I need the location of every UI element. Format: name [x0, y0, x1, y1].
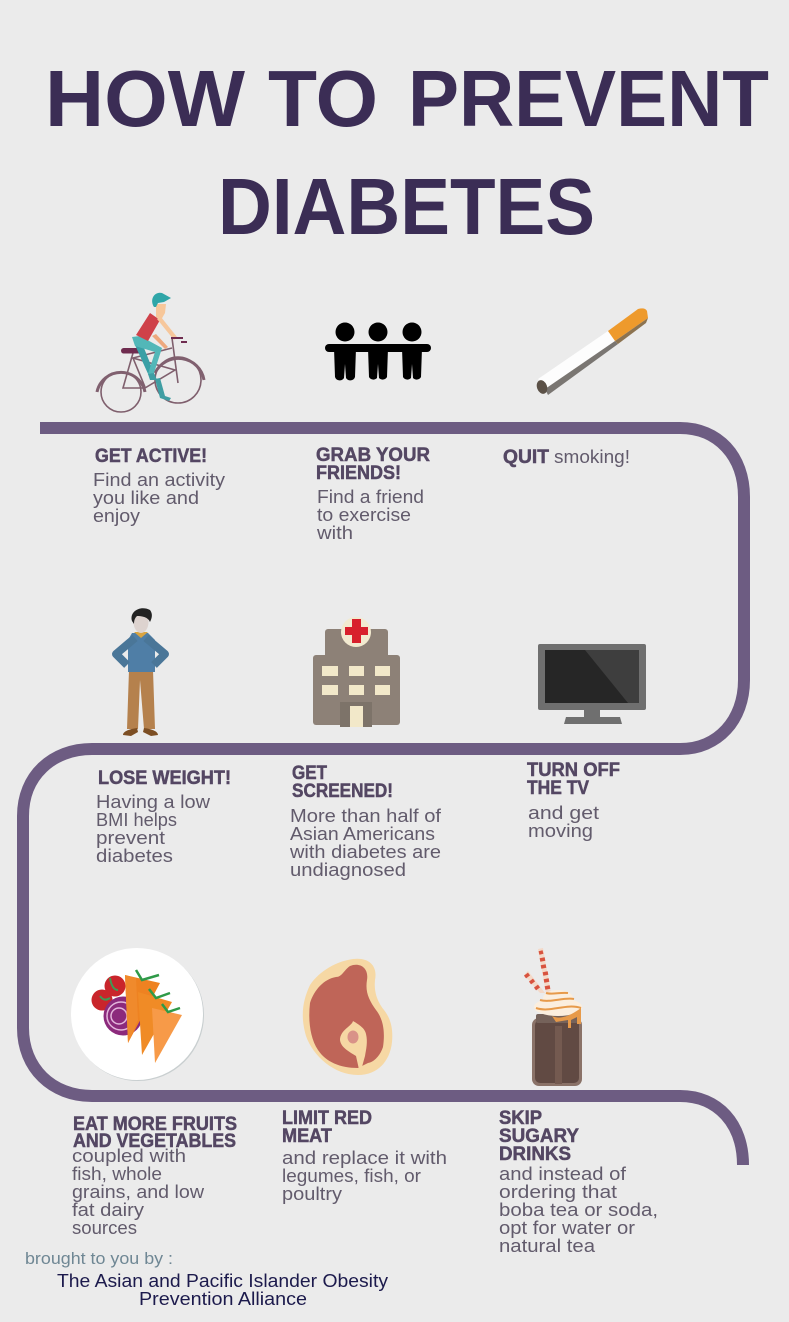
step: eat more fruits and vegetables: AND VEGETABLES: [73, 1131, 236, 1152]
step: lose weight: diabetes: [96, 845, 173, 866]
step: limit red meat: LIMIT RED: [282, 1108, 372, 1129]
step: get screened: with diabetes are: [289, 841, 441, 862]
step: get screened: More than half of: [290, 805, 442, 826]
step: eat more fruits and vegetables: grains, and low: [72, 1181, 205, 1202]
step: eat more fruits and vegetables: EAT MORE FRUITS: [73, 1114, 237, 1135]
step: grab your friends: [316, 445, 430, 543]
title: HOW: [45, 54, 245, 143]
step: get active: [93, 446, 226, 526]
step: get active: GET ACTIVE!: [95, 446, 207, 467]
step: get screened: GET: [292, 763, 327, 784]
step: lose weight: BMI helps: [96, 809, 177, 830]
step: grab your friends: to exercise: [317, 504, 411, 525]
step: skip sugary drinks: SUGARY: [499, 1126, 579, 1147]
title: PREVENT: [408, 54, 769, 143]
step: skip sugary drinks: [499, 1108, 658, 1256]
step: limit red meat: legumes, fish, or: [282, 1165, 421, 1186]
step: get active: you like and: [93, 487, 199, 508]
step: limit red meat: MEAT: [282, 1126, 332, 1147]
credit: brought to you by: brought to you by :: [25, 1249, 173, 1268]
step: eat more fruits and vegetables: sources: [72, 1217, 137, 1238]
step: grab your friends: Find a friend: [317, 486, 424, 507]
icon: milkshake jar: [524, 948, 582, 1086]
step: skip sugary drinks: DRINKS: [499, 1144, 571, 1165]
credit: alliance name: Prevention Alliance: [139, 1289, 307, 1309]
title: DIABETES: [218, 162, 595, 251]
step: quit smoking: smoking!: [554, 446, 630, 467]
icon: television: [538, 644, 646, 724]
credit: alliance name: The Asian and Pacific Islander Obesity: [57, 1271, 388, 1291]
step: turn off the tv: and get: [528, 802, 599, 823]
icon: hospital: [313, 617, 400, 727]
step: get screened: SCREENED!: [292, 781, 393, 802]
step: get screened: [289, 763, 442, 880]
title: TO: [268, 54, 378, 143]
step: quit smoking: [503, 446, 630, 468]
step: lose weight: LOSE WEIGHT!: [98, 768, 231, 789]
step: turn off the tv: [527, 760, 620, 841]
icon: three linked friends: [325, 322, 431, 380]
step: grab your friends: with: [316, 522, 353, 543]
step: lose weight: [96, 768, 231, 866]
step: lose weight: prevent: [96, 827, 165, 848]
step: get active: enjoy: [93, 505, 141, 526]
step: eat more fruits and vegetables: [72, 1114, 237, 1238]
step: get screened: Asian Americans: [290, 823, 435, 844]
icon: plate of vegetables: [71, 948, 204, 1081]
icon: red meat: [303, 959, 392, 1075]
step: turn off the tv: THE TV: [527, 778, 589, 799]
step: grab your friends: FRIENDS!: [316, 463, 401, 484]
step: skip sugary drinks: natural tea: [499, 1235, 596, 1256]
step: quit smoking: QUIT: [503, 447, 549, 468]
step: skip sugary drinks: boba tea or soda,: [499, 1199, 658, 1220]
step: grab your friends: GRAB YOUR: [316, 445, 430, 466]
step: get screened: undiagnosed: [290, 859, 406, 880]
winding path line: [23, 428, 744, 1165]
step: limit red meat: poultry: [282, 1183, 343, 1204]
step: limit red meat: [282, 1108, 447, 1204]
step: turn off the tv: TURN OFF: [527, 760, 620, 781]
step: skip sugary drinks: and instead of: [499, 1163, 627, 1184]
step: turn off the tv: moving: [528, 820, 593, 841]
step: skip sugary drinks: ordering that: [499, 1181, 617, 1202]
step: skip sugary drinks: opt for water or: [499, 1217, 635, 1238]
step: eat more fruits and vegetables: coupled with: [72, 1145, 186, 1166]
icon: cigarette: [535, 308, 648, 395]
step: eat more fruits and vegetables: fish, whole: [72, 1163, 162, 1184]
step: lose weight: Having a low: [96, 791, 211, 812]
credit: alliance name: [57, 1271, 388, 1309]
step: limit red meat: and replace it with: [282, 1147, 447, 1168]
step: eat more fruits and vegetables: fat dairy: [72, 1199, 145, 1220]
step: get active: Find an activity: [93, 469, 226, 490]
icon: standing man: [116, 608, 165, 736]
icon: cyclist: [97, 293, 204, 412]
title: [45, 54, 769, 251]
step: skip sugary drinks: SKIP: [499, 1108, 542, 1129]
